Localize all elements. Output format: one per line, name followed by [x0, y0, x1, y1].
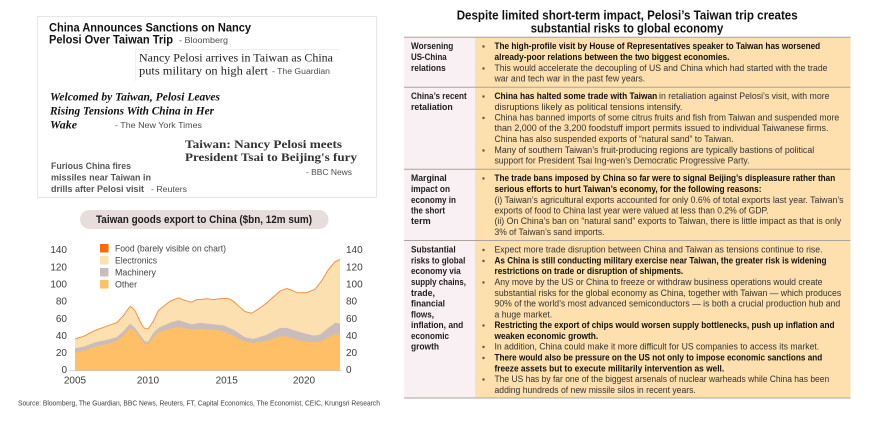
row label: Worsening — [411, 41, 453, 51]
left y axis labels: 20 — [56, 348, 67, 359]
chart legend: Other — [115, 278, 137, 290]
row bullets: substantial risks for the global economy as China, together with Taiwan — which produces — [494, 288, 842, 298]
row bullets — [482, 173, 844, 237]
row label: flows, — [411, 310, 434, 320]
main title: Despite limited short-term impact, Pelosi’s Taiwan trip creates — [457, 8, 798, 22]
x axis labels — [64, 376, 316, 386]
row bullets: disruptions likely as political tensions intensify. — [494, 102, 682, 112]
stacked areas — [75, 259, 340, 371]
headline: BBC News — [185, 137, 357, 177]
left y axis labels — [50, 245, 67, 376]
headline: The New York Times: - The New York Times — [115, 120, 202, 130]
left y axis labels: 100 — [50, 280, 67, 290]
row bullets: freeze assets but to execute militarily intervention as well. — [494, 364, 724, 374]
headline: The Guardian — [136, 50, 340, 81]
row label: economic — [411, 331, 449, 341]
chart legend: Electronics — [115, 254, 157, 266]
row bullets: There would also be pressure on the US not only to impose economic sanctions and — [494, 352, 822, 362]
headline: Reuters: missiles near Taiwan in — [51, 172, 151, 182]
x axis line — [70, 370, 342, 372]
row bullets: China has also suspended exports of “natural sand” to Taiwan. — [494, 134, 734, 144]
right y axis labels — [346, 245, 363, 376]
left y axis labels: 60 — [56, 314, 67, 325]
row bullets: a huge market. — [494, 310, 552, 320]
chart legend — [100, 242, 226, 290]
row: Substantial risks to global economy — [411, 244, 842, 395]
source note: Source: Bloomberg, The Guardian, BBC News, Reuters, FT, Capital Economics, The Economist, CEIC, Krungsri Research — [18, 398, 380, 408]
row bullets — [482, 91, 839, 166]
main title — [457, 8, 798, 36]
row label: China’s recent — [411, 91, 467, 101]
row: Worsening US-China relations — [411, 41, 828, 84]
row: China's recent retaliation — [411, 91, 839, 166]
right y axis labels: 120 — [346, 262, 363, 273]
row bullets: China has halted some trade with Taiwan — [494, 91, 657, 101]
headline: Reuters — [51, 161, 187, 194]
row label: impact on — [411, 184, 450, 194]
row bullets: already-poor relations between the two biggest economies. — [494, 52, 730, 62]
row bullets: 3% of Taiwan’s sand imports. — [494, 227, 604, 237]
headline: Bloomberg: Pelosi Over Taiwan Trip — [49, 32, 173, 46]
left y axis labels: 140 — [50, 245, 67, 256]
row label: risks to global — [411, 256, 465, 266]
area chart: Taiwan goods export to China — [50, 242, 363, 386]
row label: economy in — [411, 195, 456, 205]
row label: financial — [411, 298, 445, 308]
row bullets — [482, 41, 828, 84]
x axis labels: 2015 — [216, 376, 238, 386]
left y axis labels: 80 — [56, 297, 67, 308]
row: Marginal impact on economy — [411, 173, 844, 237]
x axis labels: 2005 — [64, 376, 87, 386]
row bullets: weaken economic growth. — [494, 331, 598, 341]
row bullets: (ii) On China’s ban on “natural sand” exports to Taiwan, there is little impact as that is only — [494, 216, 842, 226]
row bullets: This would accelerate the decoupling of US and China which had started with the trade — [494, 63, 828, 73]
chart title pill — [80, 210, 328, 229]
row bullets: 90% of the world’s most advanced semiconductors — is both a crucial production hub and — [494, 298, 840, 308]
headline: BBC News: President Tsai to Beijing's fury — [185, 150, 357, 164]
table: risks — [404, 37, 850, 398]
headline: The New York Times — [49, 90, 220, 132]
row bullets: Many of southern Taiwan’s fruit-producing regions are typically bastions of political — [494, 145, 814, 155]
row label: growth — [411, 342, 439, 352]
row bullets: restrictions on trade or disruption of shipments. — [494, 266, 683, 276]
row bullets: Restricting the export of chips would worsen supply bottlenecks, push up inflation and — [494, 320, 834, 330]
chart legend: Food (barely visible on chart) — [115, 242, 226, 254]
left y axis labels: 120 — [50, 262, 67, 273]
row bullets: The trade bans imposed by China so far were to signal Beijing’s displeasure rather than — [494, 173, 835, 183]
row bullets: support for President Tsai Ing-wen’s Democratic Progressive Party. — [494, 156, 750, 166]
row label — [411, 41, 453, 73]
row label: Substantial — [411, 244, 456, 254]
headline: BBC News: - BBC News — [306, 167, 352, 177]
right y axis labels: 140 — [346, 245, 363, 256]
x axis labels: 2020 — [293, 376, 316, 386]
headline: BBC News: Taiwan: Nancy Pelosi meets — [185, 137, 342, 151]
headline: The Guardian: Nancy Pelosi arrives in Taiwan as China — [139, 52, 333, 64]
headline: Bloomberg: - Bloomberg — [179, 35, 228, 45]
row label: the short — [411, 206, 445, 216]
row bullets — [482, 244, 842, 395]
row label: inflation, and — [411, 320, 463, 330]
row bullets: Expect more trade disruption between China and Taiwan as tensions continue to rise. — [494, 244, 822, 254]
row bullets: war and tech war in the past few years. — [494, 74, 645, 84]
row label: US-China — [411, 52, 447, 62]
row label — [411, 173, 456, 226]
right y axis labels: 20 — [346, 348, 358, 359]
row bullets: in retaliation against Pelosi’s visit, with more — [659, 91, 830, 101]
left y axis labels: 40 — [56, 331, 67, 342]
row bullets: The US has by far one of the biggest arsenals of nuclear warheads while China has been — [494, 374, 829, 384]
main title: substantial risks to global economy — [531, 20, 724, 36]
row label: supply chains, — [411, 277, 466, 287]
row label: economy via — [411, 266, 461, 276]
chart legend: Machinery — [115, 266, 156, 278]
headline: The New York Times: Rising Tensions With China in Her — [49, 104, 214, 118]
row bullets: China has banned imports of some citrus fruits and fish from Taiwan and suspended more — [494, 112, 839, 122]
left y axis labels: 0 — [61, 365, 67, 376]
row label: Marginal — [411, 173, 447, 183]
headline: The New York Times: Welcomed by Taiwan, Pelosi Leaves — [50, 90, 220, 104]
row label: term — [411, 216, 431, 226]
right y axis labels: 40 — [346, 331, 358, 342]
headline: Reuters: drills after Pelosi visit — [51, 184, 144, 194]
row bullets: (i) Taiwan’s agricultural exports accounted for only 0.6% of total exports last year. Taiwan’s — [494, 195, 844, 205]
row bullets: adding hundreds of new missile silos in recent years. — [494, 385, 696, 395]
row label: relations — [411, 63, 446, 73]
row bullets: Any move by the US or China to freeze or withdraw business operations would create — [494, 277, 823, 287]
headline: The Guardian: - The Guardian — [272, 66, 330, 76]
row label — [411, 244, 466, 352]
x axis labels: 2010 — [137, 376, 160, 386]
chart title pill: Taiwan goods export to China ($bn, 12m sum) — [96, 214, 312, 226]
row label — [411, 91, 467, 112]
row bullets: In addition, China could make it more difficult for US companies to access its market. — [494, 342, 819, 352]
row bullets: exports of food to China last year were valued at less than 0.2% of GDP. — [494, 206, 768, 216]
right y axis labels: 100 — [346, 280, 363, 290]
headline: Reuters: - Reuters — [151, 184, 187, 194]
row label: trade, — [411, 288, 435, 298]
row label: retaliation — [411, 102, 453, 112]
right y axis labels: 0 — [346, 365, 352, 376]
row bullets: The high-profile visit by House of Representatives speaker to Taiwan has worsened — [494, 41, 820, 51]
right y axis labels: 80 — [346, 297, 358, 308]
row bullets: than 2,000 of the 3,200 foodstuff import permits issued to individual Taiwanese firms. — [494, 123, 828, 133]
panel: news headlines — [38, 16, 376, 198]
headline: Reuters: Furious China fires — [51, 161, 131, 171]
headline: Bloomberg: China Announces Sanctions on Nancy — [49, 20, 251, 34]
headline: The Guardian: puts military on high alert — [139, 64, 269, 78]
row bullets: serious efforts to hurt Taiwan’s economy, for the following reasons: — [494, 184, 762, 194]
headline: Bloomberg — [49, 20, 251, 46]
right y axis labels: 60 — [346, 314, 358, 325]
row bullets: As China is still conducting military exercise near Taiwan, the greater risk is widening — [494, 256, 826, 266]
headline: The New York Times: Wake — [50, 118, 77, 132]
